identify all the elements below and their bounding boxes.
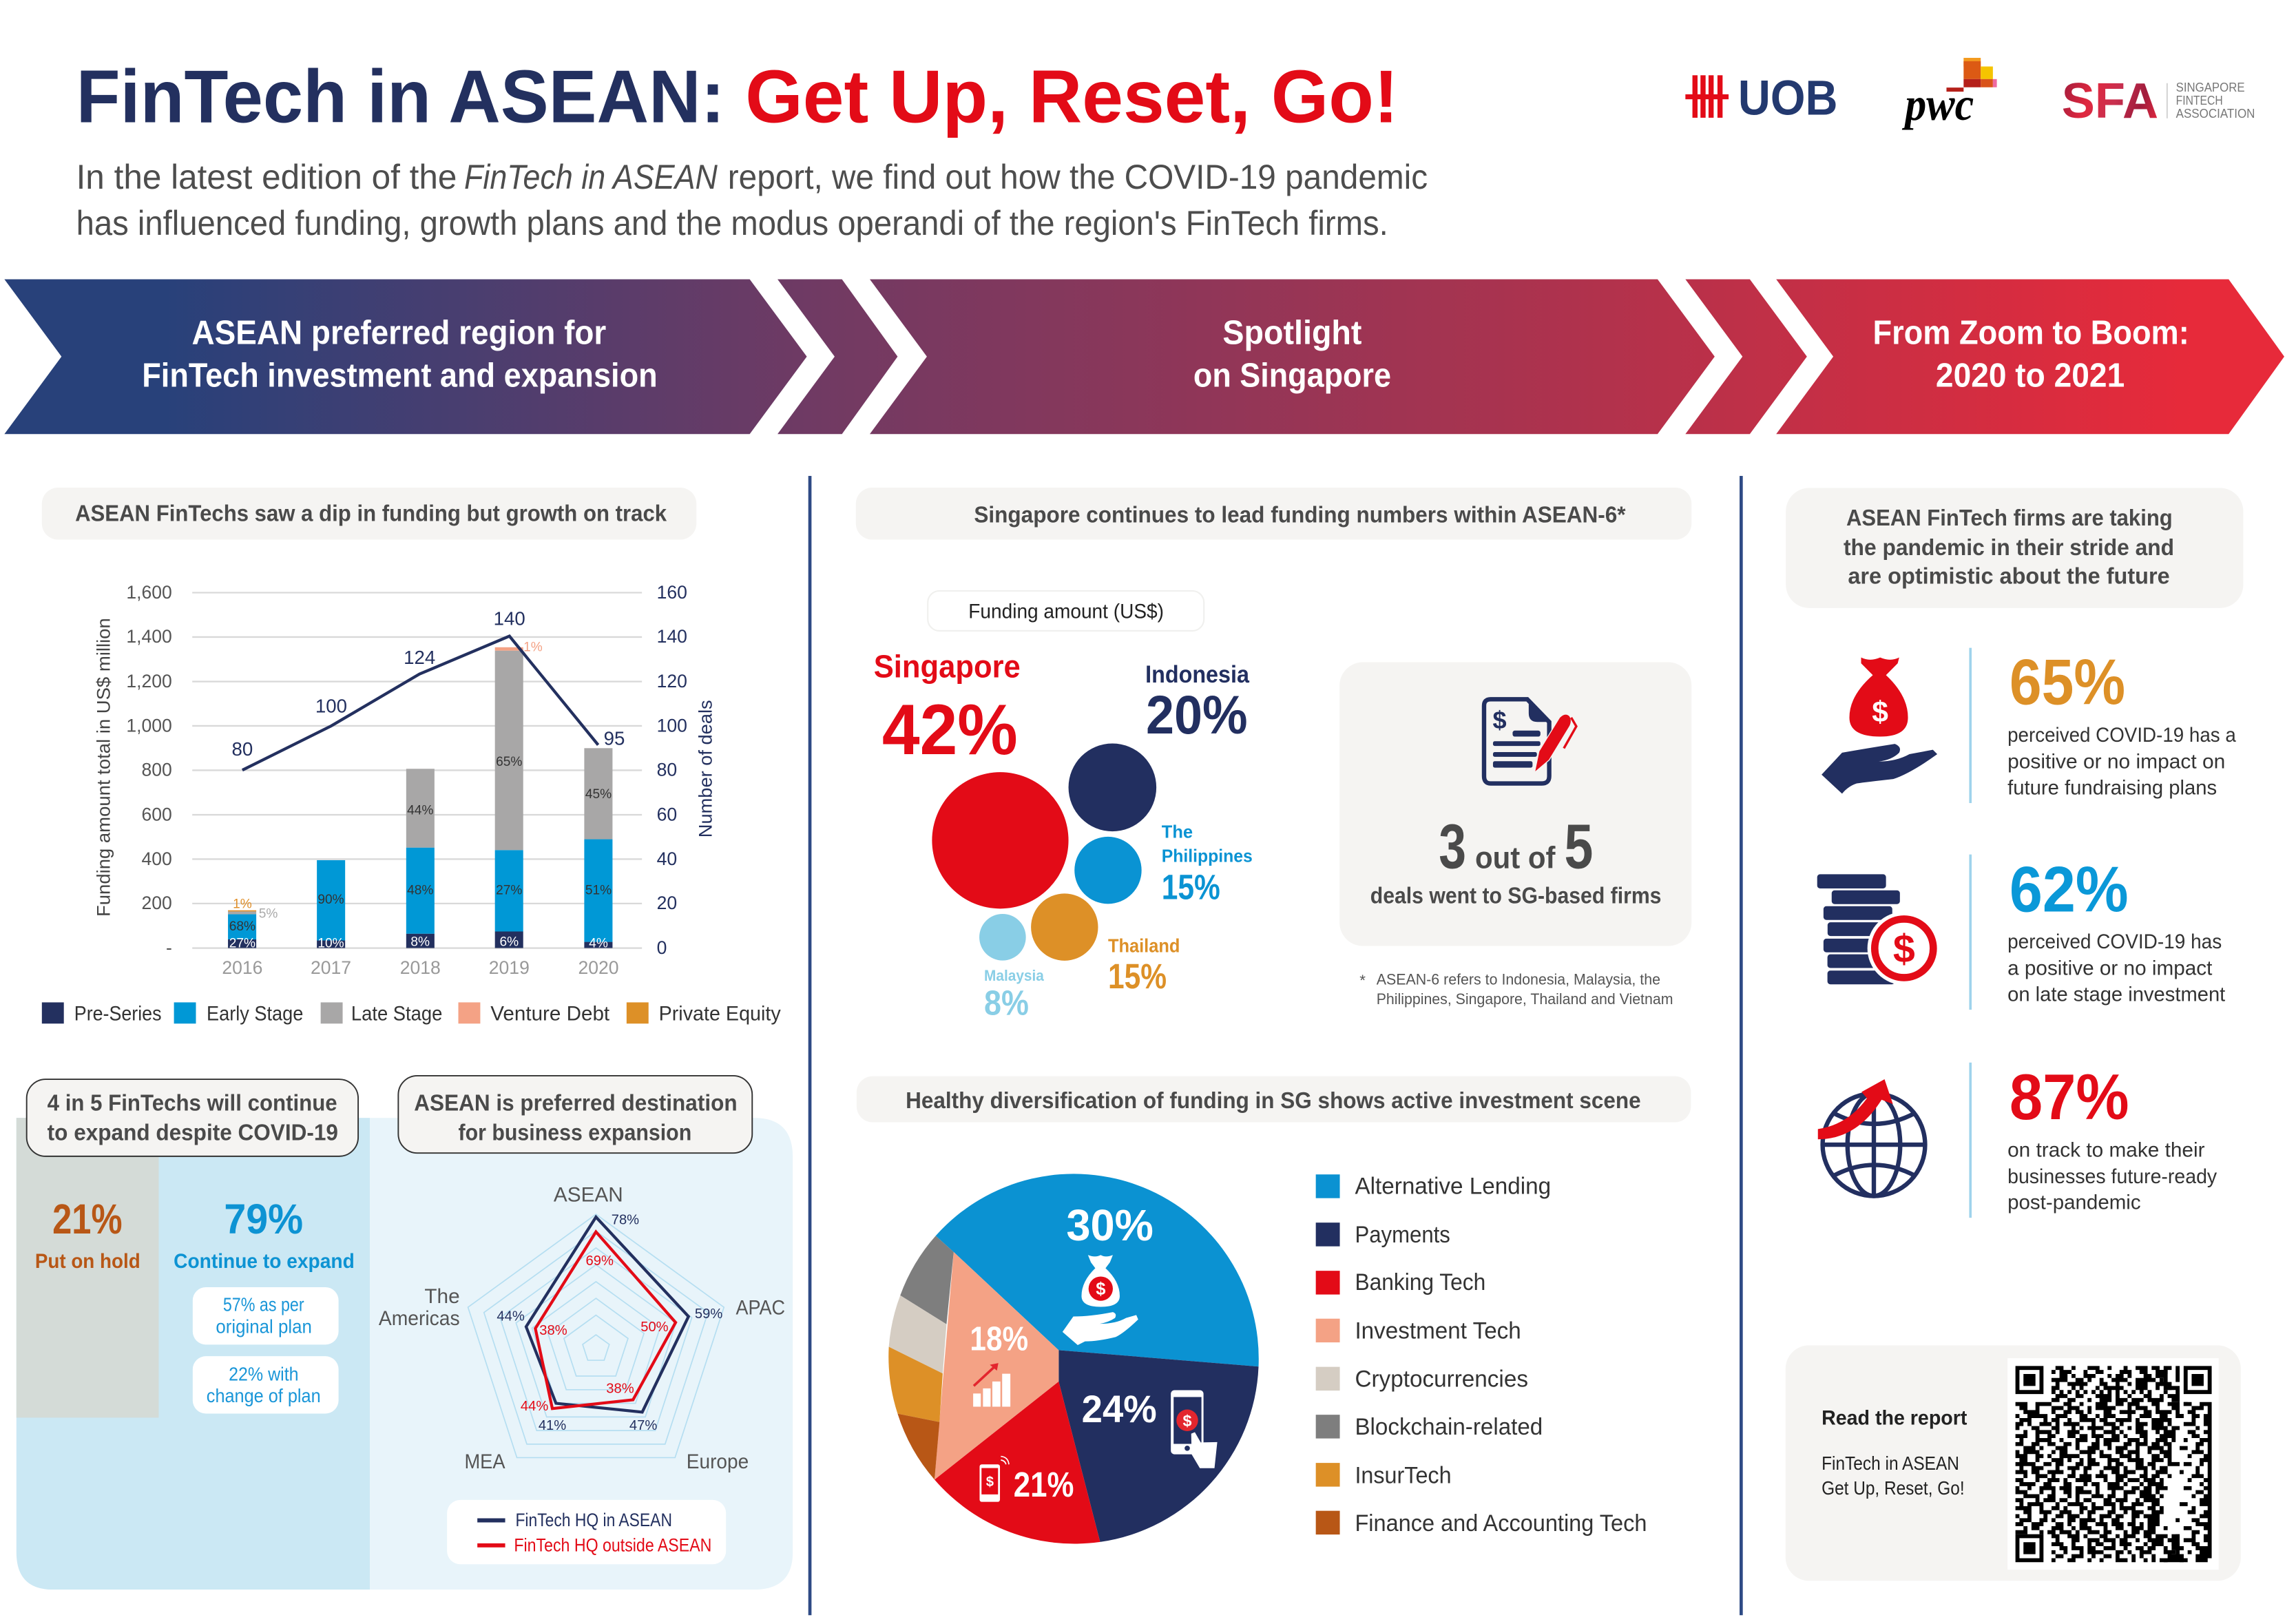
bar percent labels: 8% [410,935,430,950]
banner heading: From Zoom to Boom: 2020 to 2021 [1936,357,2125,394]
icon: phone with hand: $ [1182,1412,1191,1430]
footnote: Philippines, Singapore, Thailand and Vietnam [1377,990,1673,1008]
heading: taking the pandemic in stride: the pandemic in their stride and [1844,534,2174,560]
heading: taking the pandemic in stride [1786,488,2243,608]
radar value labels: 38% [539,1323,567,1338]
chart legend: Venture Debt [490,1003,610,1026]
left axis labels: 1,200 [126,671,172,691]
text: read the report: Read the report [1822,1406,1968,1429]
stat: 87%: post-pandemic [2007,1191,2141,1214]
left axis labels: - [166,937,172,958]
text: deals went to SG: deals went to SG-based firms [1370,883,1661,908]
icon: small phone with signal [979,1457,1009,1502]
stat: 3 out of 5 [1439,811,1593,882]
banner heading: ASEAN preferred region [142,315,658,394]
radar value labels: 78% [612,1212,639,1227]
stat: 21% put on hold: Put on hold [35,1250,140,1273]
radar value labels [497,1212,722,1433]
pie legend: Investment Tech [1355,1318,1521,1344]
bar percent labels: 44% [407,804,433,818]
text: read the report: FinTech in ASEAN [1822,1453,1959,1474]
left axis labels: 200 [142,893,172,913]
right axis labels: 0 [657,937,667,958]
left axis labels: 600 [142,804,172,824]
left axis labels: 800 [142,760,172,780]
chart legend: Pre-Series [74,1003,162,1026]
icon: coin stack [1817,874,1941,985]
title [76,55,1399,138]
bar percent labels: 1% [233,897,252,911]
axis title: number of deals: Number of deals [695,700,716,837]
pie legend: Alternative Lending [1355,1174,1551,1200]
icon: globe with arrow [1818,1079,1925,1196]
radar axis labels: The [424,1285,460,1308]
label: Singapore 42%: 42% [882,690,1018,770]
stat: 21% put on hold [35,1196,140,1273]
subtitle [76,158,1428,242]
year labels: 2018 [400,957,441,978]
deal count labels: 124 [404,647,435,668]
label: Indonesia 20%: 20% [1146,685,1248,745]
label: Thailand 15%: Thailand [1108,935,1180,956]
heading: funding dip [42,488,696,540]
radar value labels: 41% [539,1418,566,1433]
left axis labels: 1,400 [126,626,172,647]
icon: small phone with signal: $ [986,1475,994,1490]
bar percent labels: 48% [407,884,433,898]
logo: SFA: FINTECH [2176,93,2223,107]
banner heading: From Zoom to Boom: From Zoom to Boom: [1873,315,2189,352]
stat: 87%: on track to make their [2007,1139,2205,1162]
deal count labels: 80 [232,738,253,760]
stat: 79% continue to expand: 79% [224,1196,303,1243]
heading: Singapore leads [856,488,1691,540]
right axis labels [657,582,687,958]
chart legend: Private Equity [659,1003,781,1026]
icon: money bag and hand: $ [1872,696,1888,729]
deal count labels [232,607,625,760]
subtitle: FinTech in ASEAN [464,158,718,196]
bar percent labels: 6% [499,935,519,950]
bar percent labels: 65% [496,755,522,769]
logo: SFA: ASSOCIATION [2176,106,2255,121]
panel: Singapore funding bubbles [856,488,1691,1023]
stat: 79% continue to expand: Continue to expand [174,1250,355,1273]
right axis labels: 160 [657,582,687,603]
label: Thailand 15%: 15% [1108,957,1167,996]
banner heading: From Zoom to Boom [1873,315,2189,394]
panel: funding chart [42,488,781,1026]
panel: optimism stats [1786,488,2243,1581]
pie chart [888,1174,1259,1544]
label: Singapore 42%: Singapore [874,648,1021,684]
panel: expansion plans and radar [17,1076,793,1590]
text: read the report [1822,1406,1968,1499]
logo: UOB [1685,72,1837,126]
QR code [2007,1358,2219,1570]
footnote [1359,970,1673,1008]
radar value labels: 69% [586,1253,614,1269]
stat: 62%: 62% [2010,853,2129,925]
bubbles [932,743,1156,961]
pie legend: Cryptocurrencies [1355,1366,1528,1392]
bar percent labels: 5% [259,907,278,922]
label: Indonesia 20%: Indonesia [1145,661,1249,688]
bar percent labels: 90% [317,893,344,907]
right axis labels: 140 [657,626,687,647]
stat: 65%: 65% [2010,646,2125,718]
stat: 3 out of 5: out of [1475,841,1556,875]
icon: money bag and hand [1822,658,1937,793]
left axis labels: 1,000 [126,715,172,736]
heading: diversification [857,1076,1691,1123]
stat: 3 out of 5: 3 [1439,811,1466,882]
radar axis labels: MEA [464,1450,505,1473]
right axis labels: 80 [657,760,677,780]
text: read the report: Get Up, Reset, Go! [1822,1477,1965,1499]
deal count labels: 140 [494,607,525,629]
heading: preferred destination: ASEAN is preferred destination [414,1090,738,1116]
callout: 22% with change of plan: 22% with [229,1363,299,1384]
pie label: 21%: 21% [1014,1465,1074,1504]
bar percent labels: 45% [585,787,612,802]
banner heading: ASEAN preferred region: FinTech investment and expansion [142,357,658,394]
callout: 22% with change of plan: change of plan [207,1385,321,1406]
pie legend: Finance and Accounting Tech [1355,1510,1647,1537]
radar legend [447,1500,726,1564]
stat: 62% [2007,853,2226,1006]
stat: 65%: future fundraising plans [2007,776,2217,799]
year labels: 2016 [222,957,262,978]
stat: 62%: a positive or no impact [2007,957,2213,980]
callout: 22% with change of plan [193,1356,339,1413]
deals line [242,636,598,770]
icon: money bag in hand: $ [1096,1280,1105,1299]
stacked bars [228,647,612,948]
banner heading: Spotlight on Singapore: on Singapore [1193,357,1391,394]
heading: taking the pandemic in stride: are optimistic about the future [1848,563,2170,589]
stat: 62%: on late stage investment [2007,983,2226,1006]
radar axis labels: APAC [735,1297,785,1320]
stat: 87%: 87% [2010,1061,2129,1133]
section banner arrows [4,279,2284,434]
year labels: 2020 [578,957,619,978]
pie label: 18%: 18% [970,1320,1028,1357]
label: Malaysia 8% [984,967,1044,1023]
pie legend: Blockchain-related [1355,1414,1543,1440]
stat: 62%: perceived COVID-19 has [2007,930,2222,953]
pie legend: InsurTech [1355,1462,1452,1488]
radar value labels: 59% [695,1307,722,1322]
pie legend [1316,1174,1647,1537]
radar chart [379,1184,785,1473]
label: The Philippines 15% [1162,823,1253,907]
bar percent labels [229,641,612,951]
radar axis labels: ASEAN [554,1184,623,1207]
panel: read the report [1786,1345,2241,1581]
heading: 4 in 5 FinTechs: 4 in 5 FinTechs will continue [48,1090,337,1116]
footnote: ASEAN-6 refers to Indonesia, Malaysia, the [1377,970,1660,988]
label: The Philippines 15%: The [1162,823,1193,842]
label: funding amount [928,591,1204,631]
heading: diversification: Healthy diversification of funding in SG shows active investment scene [906,1087,1641,1113]
pie label: 24%: 24% [1082,1388,1157,1430]
panel: 3 out of 5 deals [1339,662,1691,946]
banner heading: ASEAN preferred region: ASEAN preferred region for [192,315,606,352]
right axis labels: 120 [657,671,687,691]
stat: 21% put on hold: 21% [52,1196,123,1243]
subtitle: In the latest edition of the [76,158,457,196]
radar legend: FinTech HQ in ASEAN [515,1510,672,1530]
subtitle: report, we find out how the COVID-19 pandemic [728,158,1428,196]
title: FinTech in ASEAN: [76,55,725,138]
heading: preferred destination [398,1076,752,1153]
bar percent labels: 27% [229,937,255,951]
footnote: * [1359,972,1366,989]
label: Thailand 15% [1108,935,1180,996]
radar value labels: 44% [497,1309,525,1324]
right axis labels: 100 [657,715,687,736]
logo: SFA [2062,74,2255,129]
bar percent labels: 10% [317,937,344,951]
chart legend: Late Stage [351,1003,442,1026]
panel: diversification pie [857,1076,1691,1544]
label: funding amount: Funding amount (US$) [968,601,1164,623]
radar legend: FinTech HQ outside ASEAN [514,1534,711,1555]
pie label: 30%: 30% [1066,1200,1154,1250]
bar percent labels: 27% [496,884,522,898]
radar axis labels: Europe [687,1450,749,1473]
right axis labels: 20 [657,893,677,913]
heading: taking the pandemic in stride: ASEAN FinTech firms are taking [1846,505,2173,530]
label: The Philippines 15%: Philippines [1162,847,1253,866]
heading: 4 in 5 FinTechs [27,1079,358,1156]
label: Malaysia 8%: Malaysia [984,967,1044,984]
deal count labels: 95 [604,728,625,749]
radar axis labels: Americas [379,1307,460,1330]
deal count labels: 100 [315,696,347,717]
chart legend: Early Stage [207,1003,303,1026]
logo: SFA: SINGAPORE [2176,80,2245,94]
icon: contract with pen [1484,698,1576,784]
year labels [222,957,619,978]
heading: 4 in 5 FinTechs: to expand despite COVID-19 [48,1119,338,1145]
chart legend [42,1002,781,1026]
callout: 57% as per original plan: original plan [216,1316,312,1337]
logo: SFA: SFA [2062,74,2158,129]
year labels: 2017 [311,957,351,978]
label: Malaysia 8%: 8% [984,983,1029,1023]
callout: 57% as per original plan [193,1287,339,1344]
left axis labels: 1,600 [126,582,172,603]
label: Indonesia 20% [1145,661,1249,745]
radar value labels: 47% [629,1418,657,1433]
radar axis labels [379,1184,785,1473]
heading: preferred destination: for business expansion [459,1119,691,1145]
banner heading: Spotlight on Singapore [1193,315,1391,394]
stat: 87% [2007,1061,2217,1214]
left axis labels: 400 [142,849,172,869]
subtitle: has influenced funding, growth plans and the modus operandi of the region's FinTech firms. [76,204,1388,242]
axis title: funding amount: Funding amount total in US$ million [93,618,114,917]
logo: UOB: UOB [1738,72,1837,126]
title: Get Up, Reset, Go! [745,55,1399,138]
banner heading: Spotlight on Singapore: Spotlight [1222,315,1361,352]
bar percent labels: 1% [523,641,543,655]
icon: coin stack: $ [1893,927,1915,971]
left axis labels [126,582,172,958]
stat: 65%: positive or no impact on [2007,751,2225,773]
icon: phone with hand [1171,1390,1218,1468]
year labels: 2019 [489,957,530,978]
bar percent labels: 4% [589,937,608,951]
radar value labels: 50% [640,1320,669,1335]
callout: 57% as per original plan: 57% as per [223,1293,304,1315]
pie legend: Banking Tech [1355,1269,1485,1295]
stat: 79% continue to expand [174,1196,355,1273]
icon: contract with pen: $ [1492,706,1507,734]
heading: Singapore leads: Singapore continues to lead funding numbers within ASEAN-6* [974,501,1626,527]
stat: 3 out of 5: 5 [1565,811,1593,882]
heading: funding dip: ASEAN FinTechs saw a dip in funding but growth on track [75,501,667,526]
bar percent labels: 51% [585,884,612,898]
stat: 87%: businesses future-ready [2007,1165,2217,1188]
radar value labels: 44% [521,1399,548,1414]
stat: 65%: perceived COVID-19 has a [2007,724,2236,747]
label: Singapore 42% [874,648,1021,770]
label: The Philippines 15%: 15% [1162,868,1220,907]
radar value labels: 38% [606,1381,634,1396]
stat: 65% [2007,646,2236,799]
pie legend: Payments [1355,1222,1450,1248]
right axis labels: 40 [657,849,677,869]
logo: PwC: pwc [1902,78,1974,130]
logo: PwC [1902,58,1997,130]
icon: money bag in hand [1063,1255,1138,1345]
right axis labels: 60 [657,804,677,824]
bar percent labels: 68% [229,919,255,934]
icon: growth bars [973,1363,1010,1406]
